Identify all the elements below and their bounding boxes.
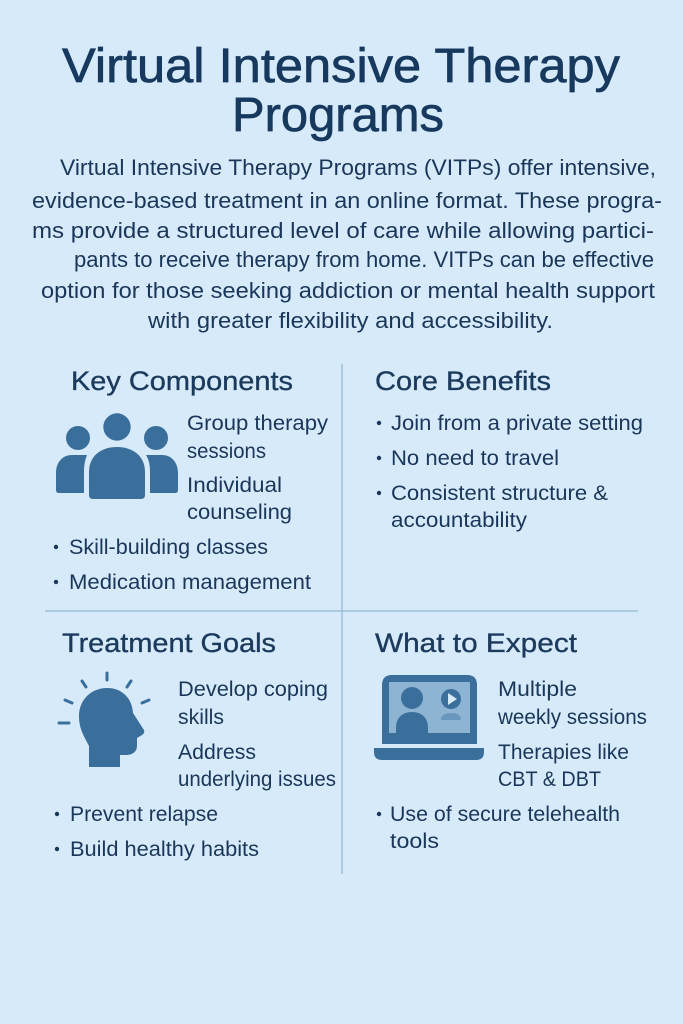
text: multiple weekly sessions <box>497 678 647 729</box>
intro paragraph: Virtual Intensive Therapy Programs (VITPs) offer intensive, <box>60 155 656 180</box>
title: Programs <box>232 89 444 142</box>
title <box>62 40 620 142</box>
panel: core benefits <box>375 366 643 532</box>
bullet: skill-building classes: Skill-building classes <box>69 536 268 559</box>
heading: what to expect: What to Expect <box>375 628 578 658</box>
text: group therapy sessions: sessions <box>187 440 266 463</box>
heading: core benefits: Core Benefits <box>375 366 551 396</box>
text: individual counseling <box>187 474 292 524</box>
text: group therapy sessions <box>187 412 329 463</box>
text: multiple weekly sessions: Multiple <box>498 678 577 701</box>
bullet: secure telehealth tools <box>377 803 620 853</box>
panel: treatment goals <box>55 628 336 861</box>
bullet: build healthy habits: Build healthy habits <box>70 838 259 861</box>
title: Virtual Intensive Therapy <box>62 40 620 93</box>
text: individual counseling: Individual <box>187 474 282 497</box>
bullet: consistent structure and accountability: accountability <box>391 509 528 532</box>
bullet: private setting: Join from a private setting <box>391 412 643 435</box>
text: develop coping skills <box>178 678 328 729</box>
bullet: secure telehealth tools: Use of secure telehealth <box>390 803 620 826</box>
text: develop coping skills: Develop coping <box>178 678 328 701</box>
heading: treatment goals: Treatment Goals <box>62 628 276 658</box>
text: address underlying issues: underlying issues <box>178 768 336 791</box>
intro paragraph: evidence-based treatment in an online format. These progra- <box>32 188 662 213</box>
bullet: consistent structure and accountability: Consistent structure & <box>391 482 608 505</box>
bullet: secure telehealth tools: tools <box>390 830 439 853</box>
text: therapies like CBT and DBT <box>498 741 629 791</box>
text: therapies like CBT and DBT: Therapies like <box>498 741 629 764</box>
icon: group of people <box>56 413 178 499</box>
intro paragraph: ms provide a structured level of care while allowing partici- <box>32 218 654 243</box>
bullet: medication management: Medication management <box>69 571 311 594</box>
panel: key components <box>54 366 329 594</box>
bullet: no need to travel: No need to travel <box>391 447 559 470</box>
text: address underlying issues: Address <box>178 741 256 764</box>
text: develop coping skills: skills <box>178 706 224 729</box>
panel: what to expect <box>374 628 647 853</box>
text: individual counseling: counseling <box>187 501 292 524</box>
icon: head with rays <box>59 673 149 767</box>
bullet: prevent relapse: Prevent relapse <box>70 803 218 826</box>
text: group therapy sessions: Group therapy <box>187 412 329 435</box>
text: multiple weekly sessions: weekly sessions <box>497 706 647 729</box>
icon: laptop video session <box>374 675 484 760</box>
text: therapies like CBT and DBT: CBT & DBT <box>498 768 601 791</box>
intro paragraph: pants to receive therapy from home. VITPs can be effective <box>74 247 654 272</box>
intro paragraph: with greater flexibility and accessibility. <box>147 308 553 333</box>
text: address underlying issues <box>178 741 336 791</box>
heading: key components: Key Components <box>71 366 293 396</box>
intro paragraph: option for those seeking addiction or mental health support <box>41 278 655 303</box>
bullet: consistent structure and accountability <box>377 482 608 532</box>
intro paragraph <box>32 155 662 333</box>
